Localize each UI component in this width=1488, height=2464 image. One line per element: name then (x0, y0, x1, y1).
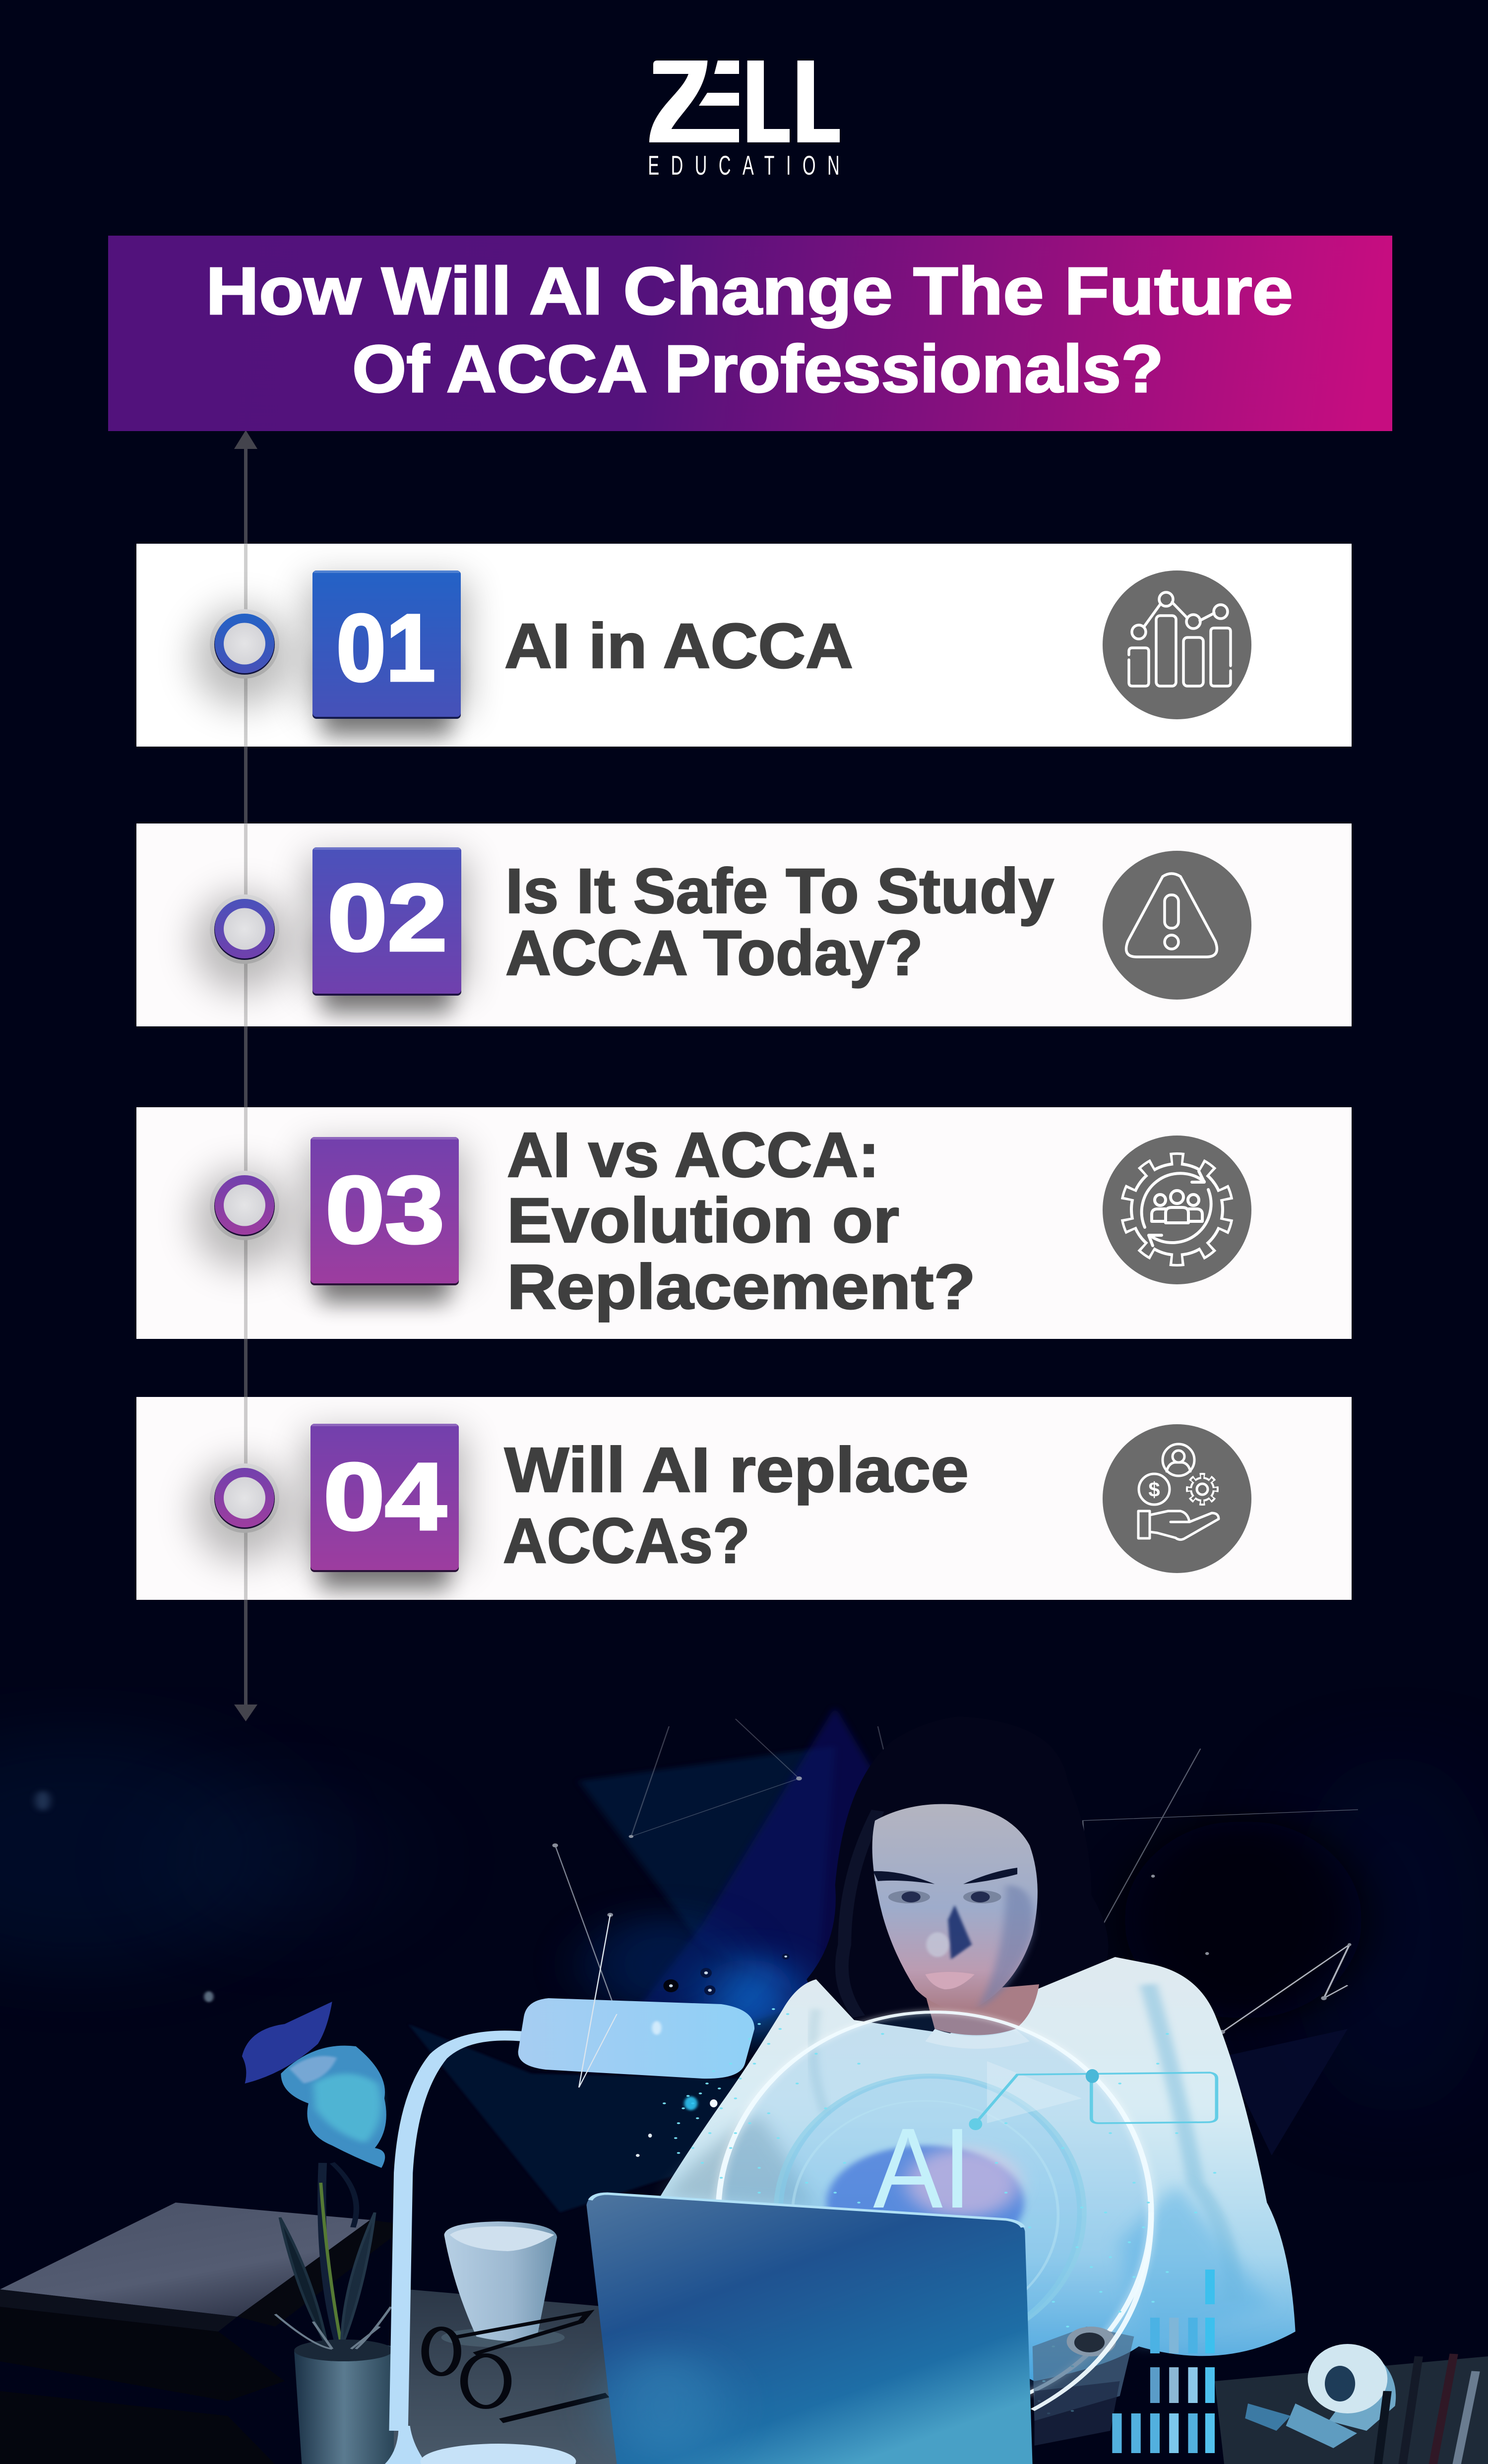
icon: hand holding person, money and gear (1103, 1424, 1251, 1573)
number box 02 (312, 847, 461, 996)
black bubbles near lamp (663, 1954, 790, 1995)
number box 04 (310, 1424, 459, 1572)
logo wordmark: EDUCATION (648, 150, 840, 181)
logo (648, 61, 840, 181)
desk lamp (384, 1915, 754, 2464)
label 04: Will AI replace (504, 1435, 969, 1506)
number box 01: 01 (336, 594, 435, 701)
title text: Of ACCA Professionals? (352, 331, 1164, 406)
label 02: Is It Safe To Study (505, 856, 1054, 927)
title text (206, 253, 1293, 406)
AI hologram rings (718, 2012, 1151, 2413)
orchid flower and stem (242, 2002, 386, 2346)
eyeglasses (425, 2313, 608, 2421)
panel: row 01 (136, 544, 1352, 747)
illustration: woman at laptop with AI hologram: AI (873, 2104, 972, 2232)
node 04 (210, 1463, 279, 1533)
constellation lines (553, 1719, 1358, 2087)
flower pot (275, 2307, 394, 2464)
title banner (108, 236, 1392, 431)
data bars (1112, 2270, 1215, 2453)
table (379, 2289, 1488, 2464)
number box 03: 03 (325, 1156, 444, 1263)
node 02 (210, 894, 279, 964)
icon: bar chart with trend line (1103, 570, 1251, 719)
woman neck and face (872, 1804, 1039, 2049)
label 03: Evolution or (507, 1185, 899, 1256)
icon: warning triangle (1103, 851, 1251, 1000)
particles (636, 2009, 1215, 2413)
arrow up (234, 430, 257, 449)
label 01: AI in ACCA (504, 611, 853, 682)
laptop (586, 2193, 1033, 2464)
stacked books and notebook (0, 2203, 408, 2464)
woman sweater (660, 1957, 1296, 2381)
woman hair (806, 1716, 1108, 2024)
lower ring arc over hand (1033, 2212, 1151, 2410)
gear outline (1125, 1158, 1229, 1261)
wrist and watch (1033, 2327, 1134, 2446)
logo mark ZELL (649, 61, 840, 142)
label 03 (507, 1120, 976, 1323)
background glow (0, 1706, 1488, 2212)
label 02: ACCA Today? (505, 918, 923, 989)
headphones (1245, 2344, 1396, 2448)
label 03: Replacement? (507, 1252, 976, 1323)
panel: row 02 (136, 823, 1352, 1026)
label 02 (505, 856, 1054, 989)
title text: How Will AI Change The Future (206, 253, 1293, 328)
panel: row 03 (136, 1107, 1352, 1339)
dollar sign: $ (1148, 1478, 1160, 1501)
label 03: AI vs ACCA: (507, 1120, 879, 1191)
number box 04: 04 (323, 1443, 446, 1550)
node 01 (210, 609, 279, 679)
illustration: woman at laptop with AI hologram (0, 1706, 1488, 2464)
number box 01 (312, 570, 461, 719)
label 04 (503, 1435, 969, 1577)
icon: gear with people and cycle arrows (1103, 1136, 1251, 1284)
node 03 (210, 1171, 279, 1240)
label 04: ACCAs? (503, 1506, 750, 1577)
pens in cup (1378, 2354, 1476, 2464)
number box 02: 02 (327, 864, 447, 971)
circuit frame (969, 2069, 1217, 2130)
cup (441, 2221, 564, 2347)
timeline line with arrowheads (234, 430, 257, 1721)
arrow down (234, 1705, 257, 1721)
number box 03 (310, 1137, 459, 1285)
panel: row 04 (136, 1397, 1352, 1600)
